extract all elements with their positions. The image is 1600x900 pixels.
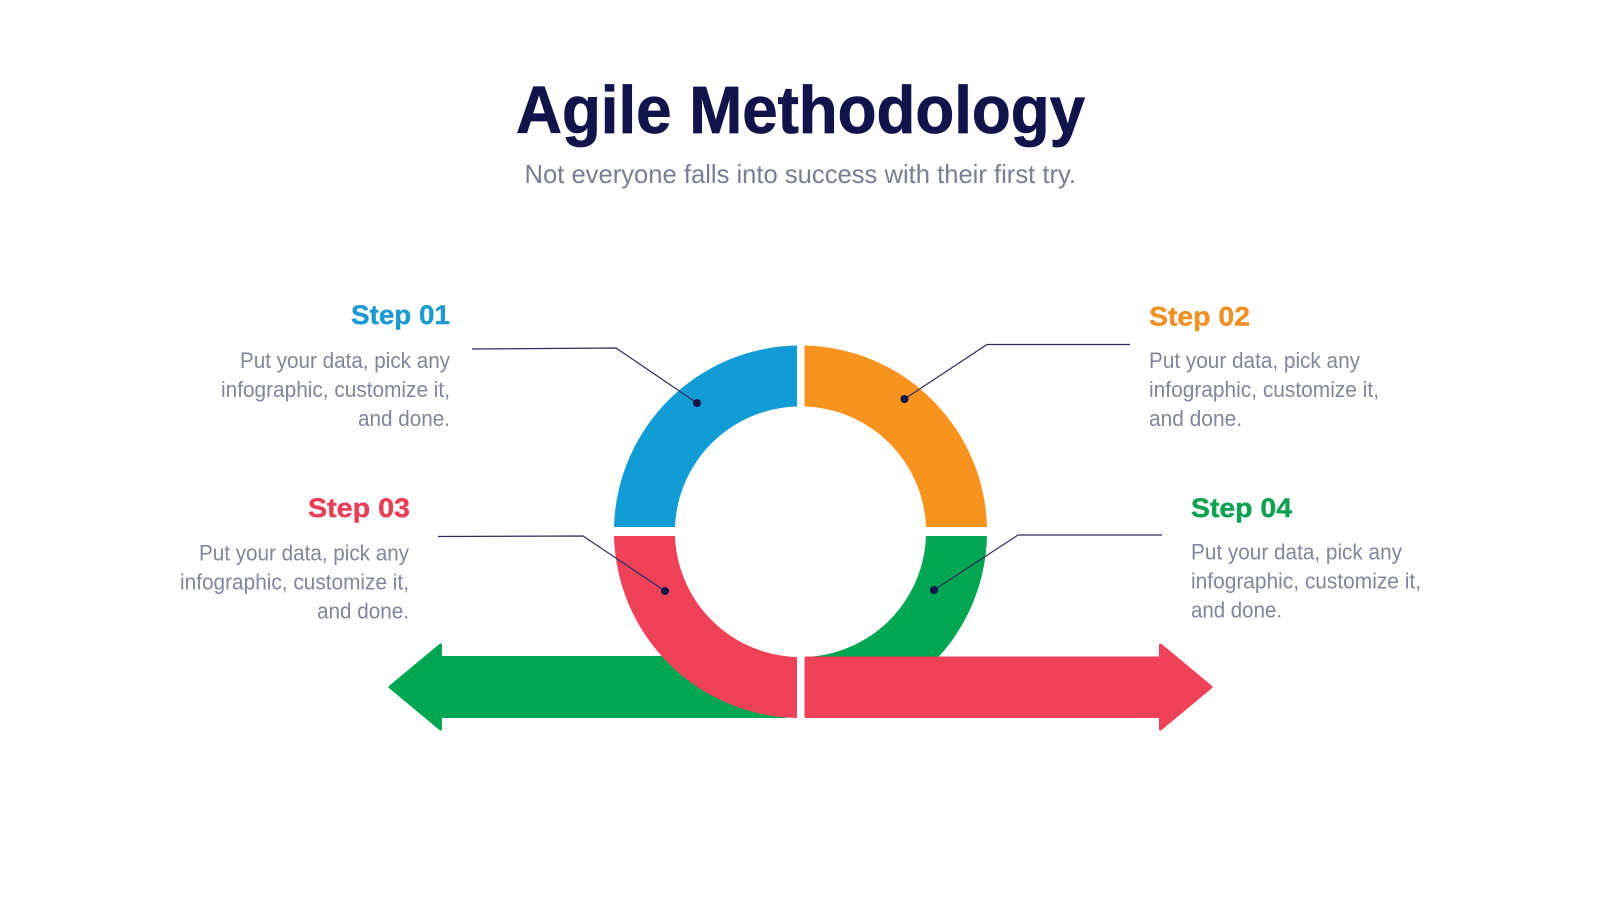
text block: step 03: Step 03 [308,493,410,523]
leader line: step 04 [930,535,1162,594]
agile loop diagram [390,346,1211,729]
ring segment: step 01 blue [614,346,797,527]
text block: step 04: and done. [1191,598,1282,622]
text block: step 03 [180,493,410,624]
text block: step 01: and done. [358,406,450,431]
text block: step 02 [1149,302,1379,431]
text block: step 02: Step 02 [1149,302,1250,332]
text block: step 01: Step 01 [351,300,450,330]
text block: step 04: Step 04 [1191,493,1292,523]
text block: step 03: infographic, customize it, [180,570,409,594]
text block: step 01 [221,300,450,431]
leader line: step 03 [438,536,669,595]
text block: step 01: Put your data, pick any [240,348,450,373]
ring segment: step 04 green [805,536,987,718]
arrow: red right [806,645,1211,729]
text block: step 02: infographic, customize it, [1149,377,1379,402]
text block: step 03: Put your data, pick any [199,540,409,566]
text block: step 02: and done. [1149,406,1242,431]
text block: step 02: Put your data, pick any [1149,348,1360,373]
ring segment: step 03 red [614,536,797,718]
text block: step 01: infographic, customize it, [221,377,450,402]
text block: step 04: infographic, customize it, [1191,568,1421,594]
text block: step 04: Put your data, pick any [1191,540,1402,564]
text block: step 04 [1191,493,1421,622]
title: Agile Methodology [516,73,1085,148]
leader line: step 02 [900,344,1130,403]
ring segment: step 02 orange [804,346,987,527]
text block: step 03: and done. [317,598,409,624]
subtitle: Not everyone falls into success with their first try. [524,159,1076,189]
arrow: green left [390,645,785,729]
leader line: step 01 [472,348,701,407]
